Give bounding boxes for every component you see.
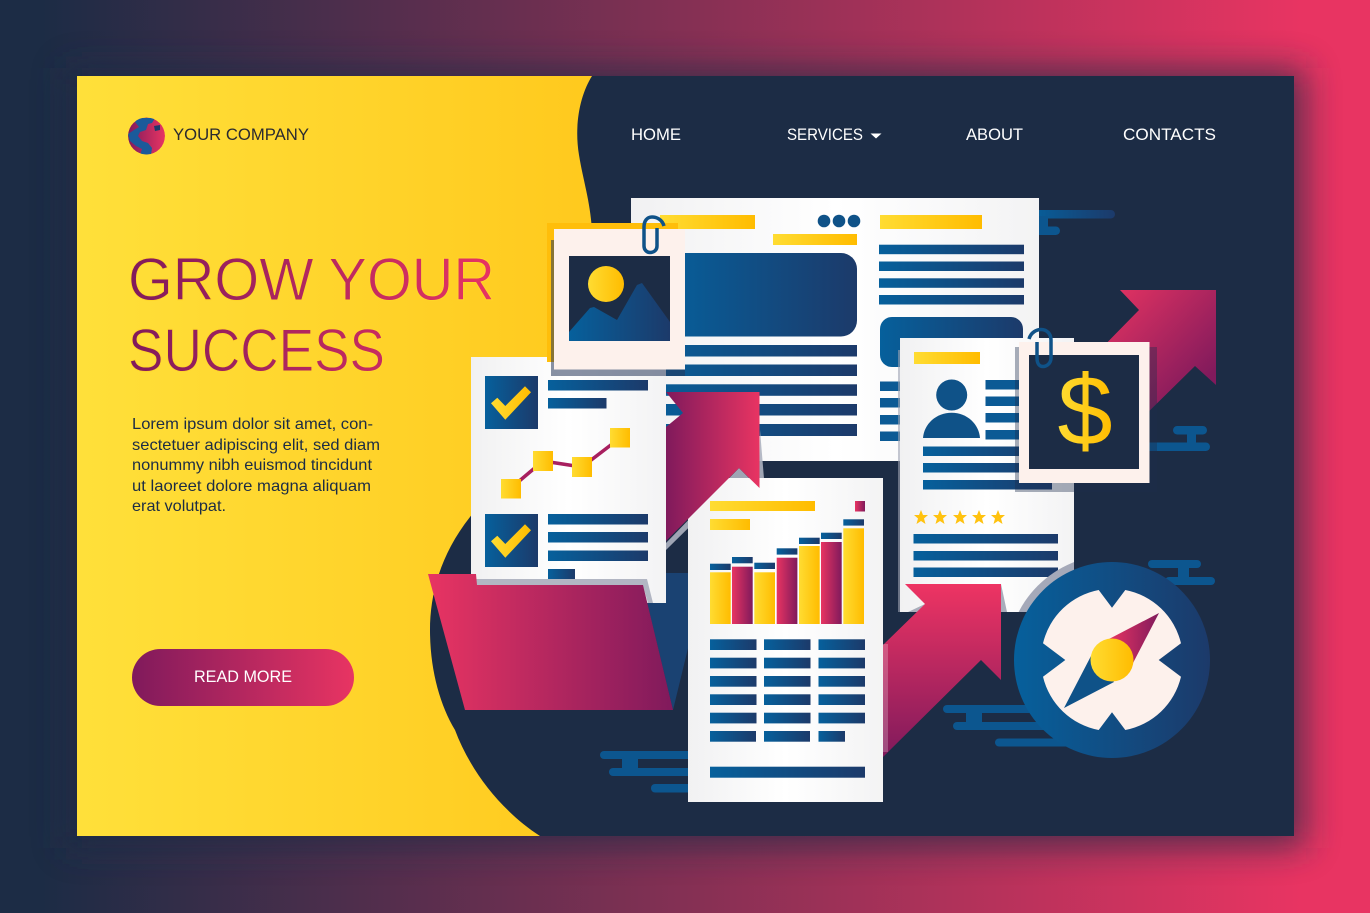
bottom text rows [914, 534, 1058, 577]
button: read more [132, 649, 354, 706]
icon: sun [588, 266, 624, 302]
icon: three dots [818, 215, 860, 227]
compass needle south [1064, 656, 1114, 708]
body text: erat volutpat. [132, 498, 226, 515]
folder front [428, 574, 673, 710]
mini line chart [501, 428, 630, 498]
top text rows [548, 380, 648, 408]
panel: checklist card [471, 357, 666, 603]
side text rows [986, 380, 1026, 440]
bottom text rows [548, 514, 648, 581]
speed lines: right of arrow [1140, 426, 1210, 451]
icon: paper clip [644, 217, 664, 252]
speed lines: top right [1030, 210, 1115, 235]
icon: dropdown caret [870, 134, 882, 138]
photo card [547, 217, 685, 376]
folder shadow strip [476, 579, 653, 603]
arrow: middle [666, 392, 760, 541]
title: GROW YOUR [128, 246, 495, 313]
arrow: large top right [1090, 290, 1216, 425]
panel: main document [631, 198, 1039, 461]
panel: bar chart document [688, 478, 883, 802]
icon: mountains [569, 283, 670, 341]
card heading bar [914, 352, 980, 364]
rating stars [914, 510, 1005, 524]
short text rows [880, 382, 905, 441]
checkbox top [485, 376, 538, 429]
profile text rows [923, 446, 1052, 490]
icon: paper clip [1029, 330, 1051, 366]
panel: dark navy blob [430, 76, 1294, 836]
data table [710, 639, 865, 742]
nav services: SERVICES [787, 125, 863, 144]
company name: YOUR COMPANY [173, 125, 309, 144]
icon: person [923, 380, 980, 438]
title [128, 246, 495, 384]
body text: nonummy nibh euismod tincidunt [132, 457, 373, 474]
nav home: HOME [631, 125, 681, 144]
body text: Lorem ipsum dolor sit amet, con- [132, 416, 373, 433]
icon: globe [128, 118, 165, 155]
arrow: lower right [883, 584, 1007, 757]
small pink square [855, 501, 865, 512]
text rows left column [640, 345, 857, 436]
body text: ut laoreet dolore magna aliquam [132, 478, 371, 495]
compass needle north [1109, 613, 1159, 663]
compass hub [1090, 638, 1134, 682]
speed lines: bottom left [600, 751, 696, 792]
body text [132, 416, 380, 515]
panel drop shadow [66, 68, 1306, 848]
button: read more: READ MORE [194, 667, 292, 686]
nav contacts: CONTACTS [1123, 125, 1216, 144]
body text: sectetuer adipiscing elit, sed diam [132, 437, 380, 454]
compass dial [1043, 590, 1181, 730]
yellow back strip [547, 223, 678, 362]
bar chart [710, 519, 864, 624]
image placeholder [660, 253, 857, 336]
arrow: middle shadow [666, 430, 766, 550]
heading bars [710, 501, 815, 530]
title: SUCCESS [128, 317, 385, 384]
speed lines: lower left of compass [943, 705, 1070, 746]
second image placeholder [880, 317, 1023, 367]
picture frame [569, 256, 670, 341]
folder back [640, 573, 690, 710]
text rows right column [879, 245, 1024, 304]
navigation [631, 125, 1216, 144]
logo [128, 118, 309, 155]
panel: yellow landing page [77, 76, 1294, 836]
speed lines: right of compass [1148, 560, 1215, 585]
compass [1014, 562, 1210, 758]
card shadow [551, 240, 685, 376]
document header bars [660, 215, 982, 245]
nav about: ABOUT [966, 125, 1023, 144]
checkbox bottom [485, 514, 538, 567]
compass shadow ring [1018, 562, 1074, 612]
card shadow [1015, 347, 1157, 492]
footer bar [710, 767, 865, 778]
icon: dollar sign: $ [1058, 354, 1113, 466]
dollar card [1015, 330, 1157, 492]
panel: person card [898, 338, 1074, 612]
